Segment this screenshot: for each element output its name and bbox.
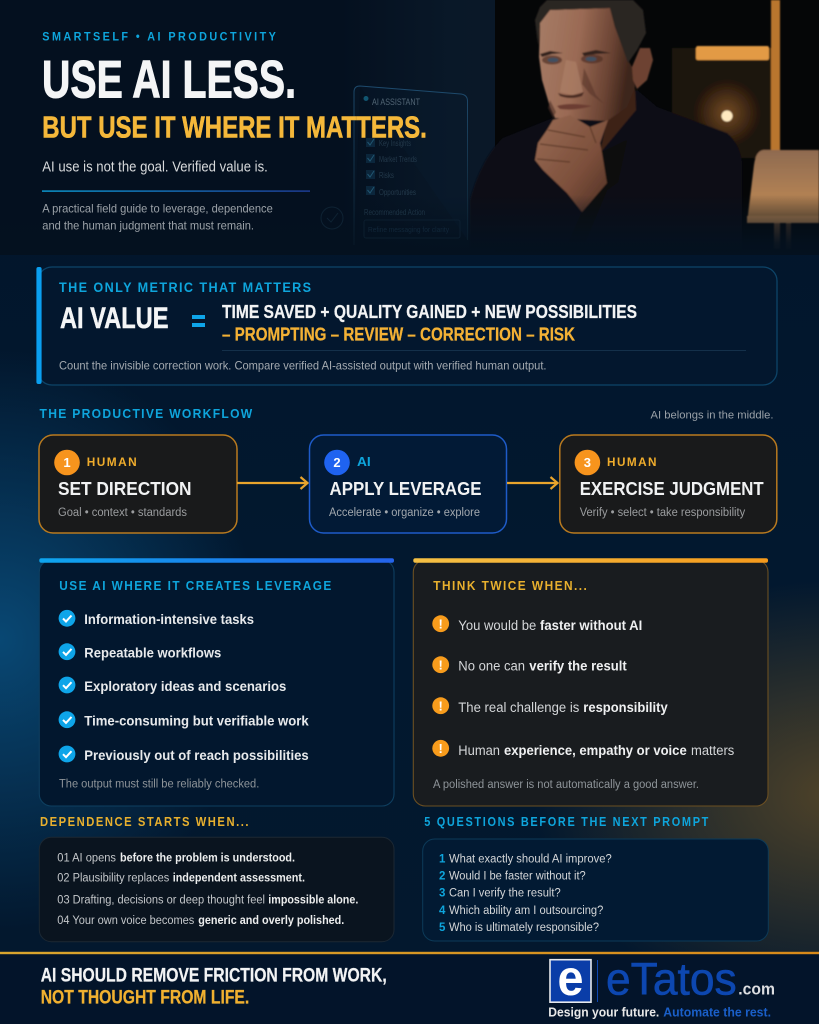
step title: SET DIRECTION — [58, 478, 192, 499]
AI assistant glass panel: Market Trends — [379, 155, 417, 164]
dependence heading: DEPENDENCE STARTS WHEN... — [40, 815, 250, 829]
dependence item 3: 03 Drafting, decisions or deep thought feel — [57, 894, 265, 906]
brows — [540, 51, 563, 57]
metric note: Count the invisible correction work. Compare verified AI-assisted output with verified human output. — [59, 358, 546, 372]
warning item 2: No one can — [458, 659, 525, 674]
question 5: Who is ultimately responsible? — [449, 922, 599, 934]
logo: eTatos — [548, 950, 775, 1020]
panel: dependence list — [39, 837, 394, 942]
face — [539, 8, 635, 121]
warning item 3: ! — [439, 698, 443, 714]
step number 2: 2 — [333, 455, 341, 470]
AI assistant glass panel — [321, 86, 468, 245]
step title: EXERCISE JUDGMENT — [580, 478, 764, 499]
accent bar — [36, 267, 42, 384]
equals sign — [192, 315, 205, 327]
warning item 4: Human — [458, 743, 500, 758]
dependence item 2 — [57, 873, 305, 885]
check item 5: Previously out of reach possibilities — [84, 747, 309, 763]
dependence item 4: 04 Your own voice becomes — [57, 915, 195, 927]
panel: the only metric that matters — [36, 267, 777, 385]
panel: five questions — [423, 839, 768, 941]
step number 3: 3 — [584, 455, 591, 470]
logo: eTatos: Design your future. — [548, 1006, 659, 1020]
workflow aside: AI belongs in the middle. — [650, 410, 774, 422]
metric heading: THE ONLY METRIC THAT MATTERS — [59, 280, 312, 295]
dependence item 1: before the problem is understood. — [120, 853, 295, 865]
role label: HUMAN — [87, 455, 138, 469]
question 4: 4 — [439, 905, 446, 917]
description: A practical field guide to leverage, dependence — [42, 202, 273, 216]
warning item 3 — [432, 697, 668, 715]
warning item 1: You would be — [458, 618, 536, 633]
mouth — [557, 104, 592, 110]
hero text block — [42, 32, 427, 232]
hair — [535, 0, 646, 63]
panel: use AI where it creates leverage — [39, 558, 394, 806]
warning item 4: matters — [691, 743, 735, 758]
main title: USE AI LESS. — [42, 50, 296, 109]
arrow: step 2 to step 3 — [507, 477, 558, 489]
check item 3: Exploratory ideas and scenarios — [84, 678, 286, 694]
description: and the human judgment that must remain. — [42, 218, 254, 232]
dependence item 2: 02 Plausibility replaces — [57, 873, 170, 885]
warning item 4 — [432, 740, 735, 758]
hero photo: thoughtful man in a dark room — [0, 0, 819, 255]
warning item 2: verify the result — [529, 659, 627, 674]
check item 1: Information-intensive tasks — [84, 611, 254, 627]
workflow card 3: human — [560, 435, 777, 533]
warning item 2 — [432, 656, 627, 674]
dependence item 4 — [57, 915, 344, 927]
step detail: Verify • select • take responsibility — [580, 507, 745, 519]
closing statement: NOT THOUGHT FROM LIFE. — [41, 987, 249, 1008]
top accent bar — [413, 558, 768, 563]
logo: eTatos: eTatos — [606, 953, 737, 1004]
panel heading: USE AI WHERE IT CREATES LEVERAGE — [59, 578, 333, 593]
eyebrow: SMARTSELF • AI PRODUCTIVITY — [42, 32, 278, 44]
warning item 4: ! — [439, 741, 443, 756]
closing statement: AI SHOULD REMOVE FRICTION FROM WORK, — [41, 966, 387, 987]
warning item 1: ! — [439, 616, 443, 632]
eye sockets and eyes — [542, 56, 562, 64]
panel note: The output must still be reliably checked. — [59, 778, 259, 790]
footer band — [0, 950, 819, 1024]
secondary title: BUT USE IT WHERE IT MATTERS. — [42, 111, 427, 145]
workflow heading: THE PRODUCTIVE WORKFLOW — [40, 406, 254, 421]
logo: eTatos: e — [558, 950, 584, 1006]
workflow card 1: human — [39, 435, 237, 533]
description — [42, 202, 273, 232]
logo: eTatos: .com — [738, 979, 775, 998]
arrow: step 1 to step 2 — [237, 477, 308, 489]
gains formula: TIME SAVED + QUALITY GAINED + NEW POSSIBILITIES — [222, 302, 637, 322]
costs formula: – PROMPTING – REVIEW – CORRECTION – RISK — [222, 325, 575, 345]
dependence item 1: 01 AI opens — [57, 853, 116, 865]
question 4: Which ability am I outsourcing? — [449, 905, 603, 917]
warning item 3: The real challenge is — [458, 700, 580, 715]
jacket — [470, 90, 742, 250]
panel: think twice when — [413, 558, 768, 806]
top accent bar — [39, 558, 394, 563]
question 2: 2 — [439, 870, 445, 882]
step number 3 — [575, 450, 600, 475]
tagline: AI use is not the goal. Verified value is. — [42, 160, 268, 176]
AI assistant glass panel: Risks — [379, 171, 394, 180]
nose — [560, 60, 583, 95]
step title: APPLY LEVERAGE — [330, 478, 482, 499]
AI assistant glass panel: AI ASSISTANT — [372, 97, 420, 107]
warning item 1 — [432, 615, 642, 633]
AI value label: AI VALUE — [60, 302, 168, 335]
warning item 4: experience, empathy or voice — [504, 743, 687, 758]
workflow card 2: AI — [310, 435, 506, 533]
question 3: 3 — [439, 888, 445, 900]
ear — [632, 48, 653, 89]
question 3: Can I verify the result? — [449, 888, 561, 900]
t-shirt — [565, 140, 627, 250]
step number 1: 1 — [63, 455, 71, 470]
neck — [600, 88, 636, 153]
step detail: Goal • context • standards — [58, 507, 187, 519]
question 1: What exactly should AI improve? — [449, 853, 612, 865]
question 1: 1 — [439, 853, 446, 865]
step number 1 — [54, 450, 80, 475]
dependence item 4: generic and overly polished. — [198, 915, 344, 927]
step number 2 — [324, 450, 350, 475]
warning item 2: ! — [439, 658, 443, 672]
AI assistant glass panel: Opportunities — [379, 188, 416, 197]
question 5: 5 — [439, 922, 446, 934]
check item 4: Time-consuming but verifiable work — [84, 712, 309, 728]
step detail: Accelerate • organize • explore — [329, 507, 480, 519]
dependence item 2: independent assessment. — [173, 873, 305, 885]
questions heading: 5 QUESTIONS BEFORE THE NEXT PROMPT — [424, 815, 710, 829]
closing statement — [41, 966, 387, 1008]
AI assistant glass panel: Refine messaging for clarity — [368, 225, 449, 234]
question 2: Would I be faster without it? — [449, 870, 586, 882]
panel note: A polished answer is not automatically a good answer. — [433, 779, 699, 791]
dependence item 3: impossible alone. — [268, 894, 358, 906]
AI assistant glass panel: Recommended Action — [364, 208, 425, 217]
role label: AI — [357, 455, 371, 469]
AI assistant glass panel: Key Insights — [379, 139, 411, 148]
logo: eTatos: Automate the rest. — [663, 1006, 771, 1020]
panel heading: THINK TWICE WHEN... — [433, 578, 588, 593]
warning item 3: responsibility — [583, 700, 668, 715]
role label: HUMAN — [607, 455, 658, 469]
hand — [535, 115, 608, 212]
warning item 1: faster without AI — [540, 618, 642, 633]
check item 2: Repeatable workflows — [84, 644, 221, 660]
